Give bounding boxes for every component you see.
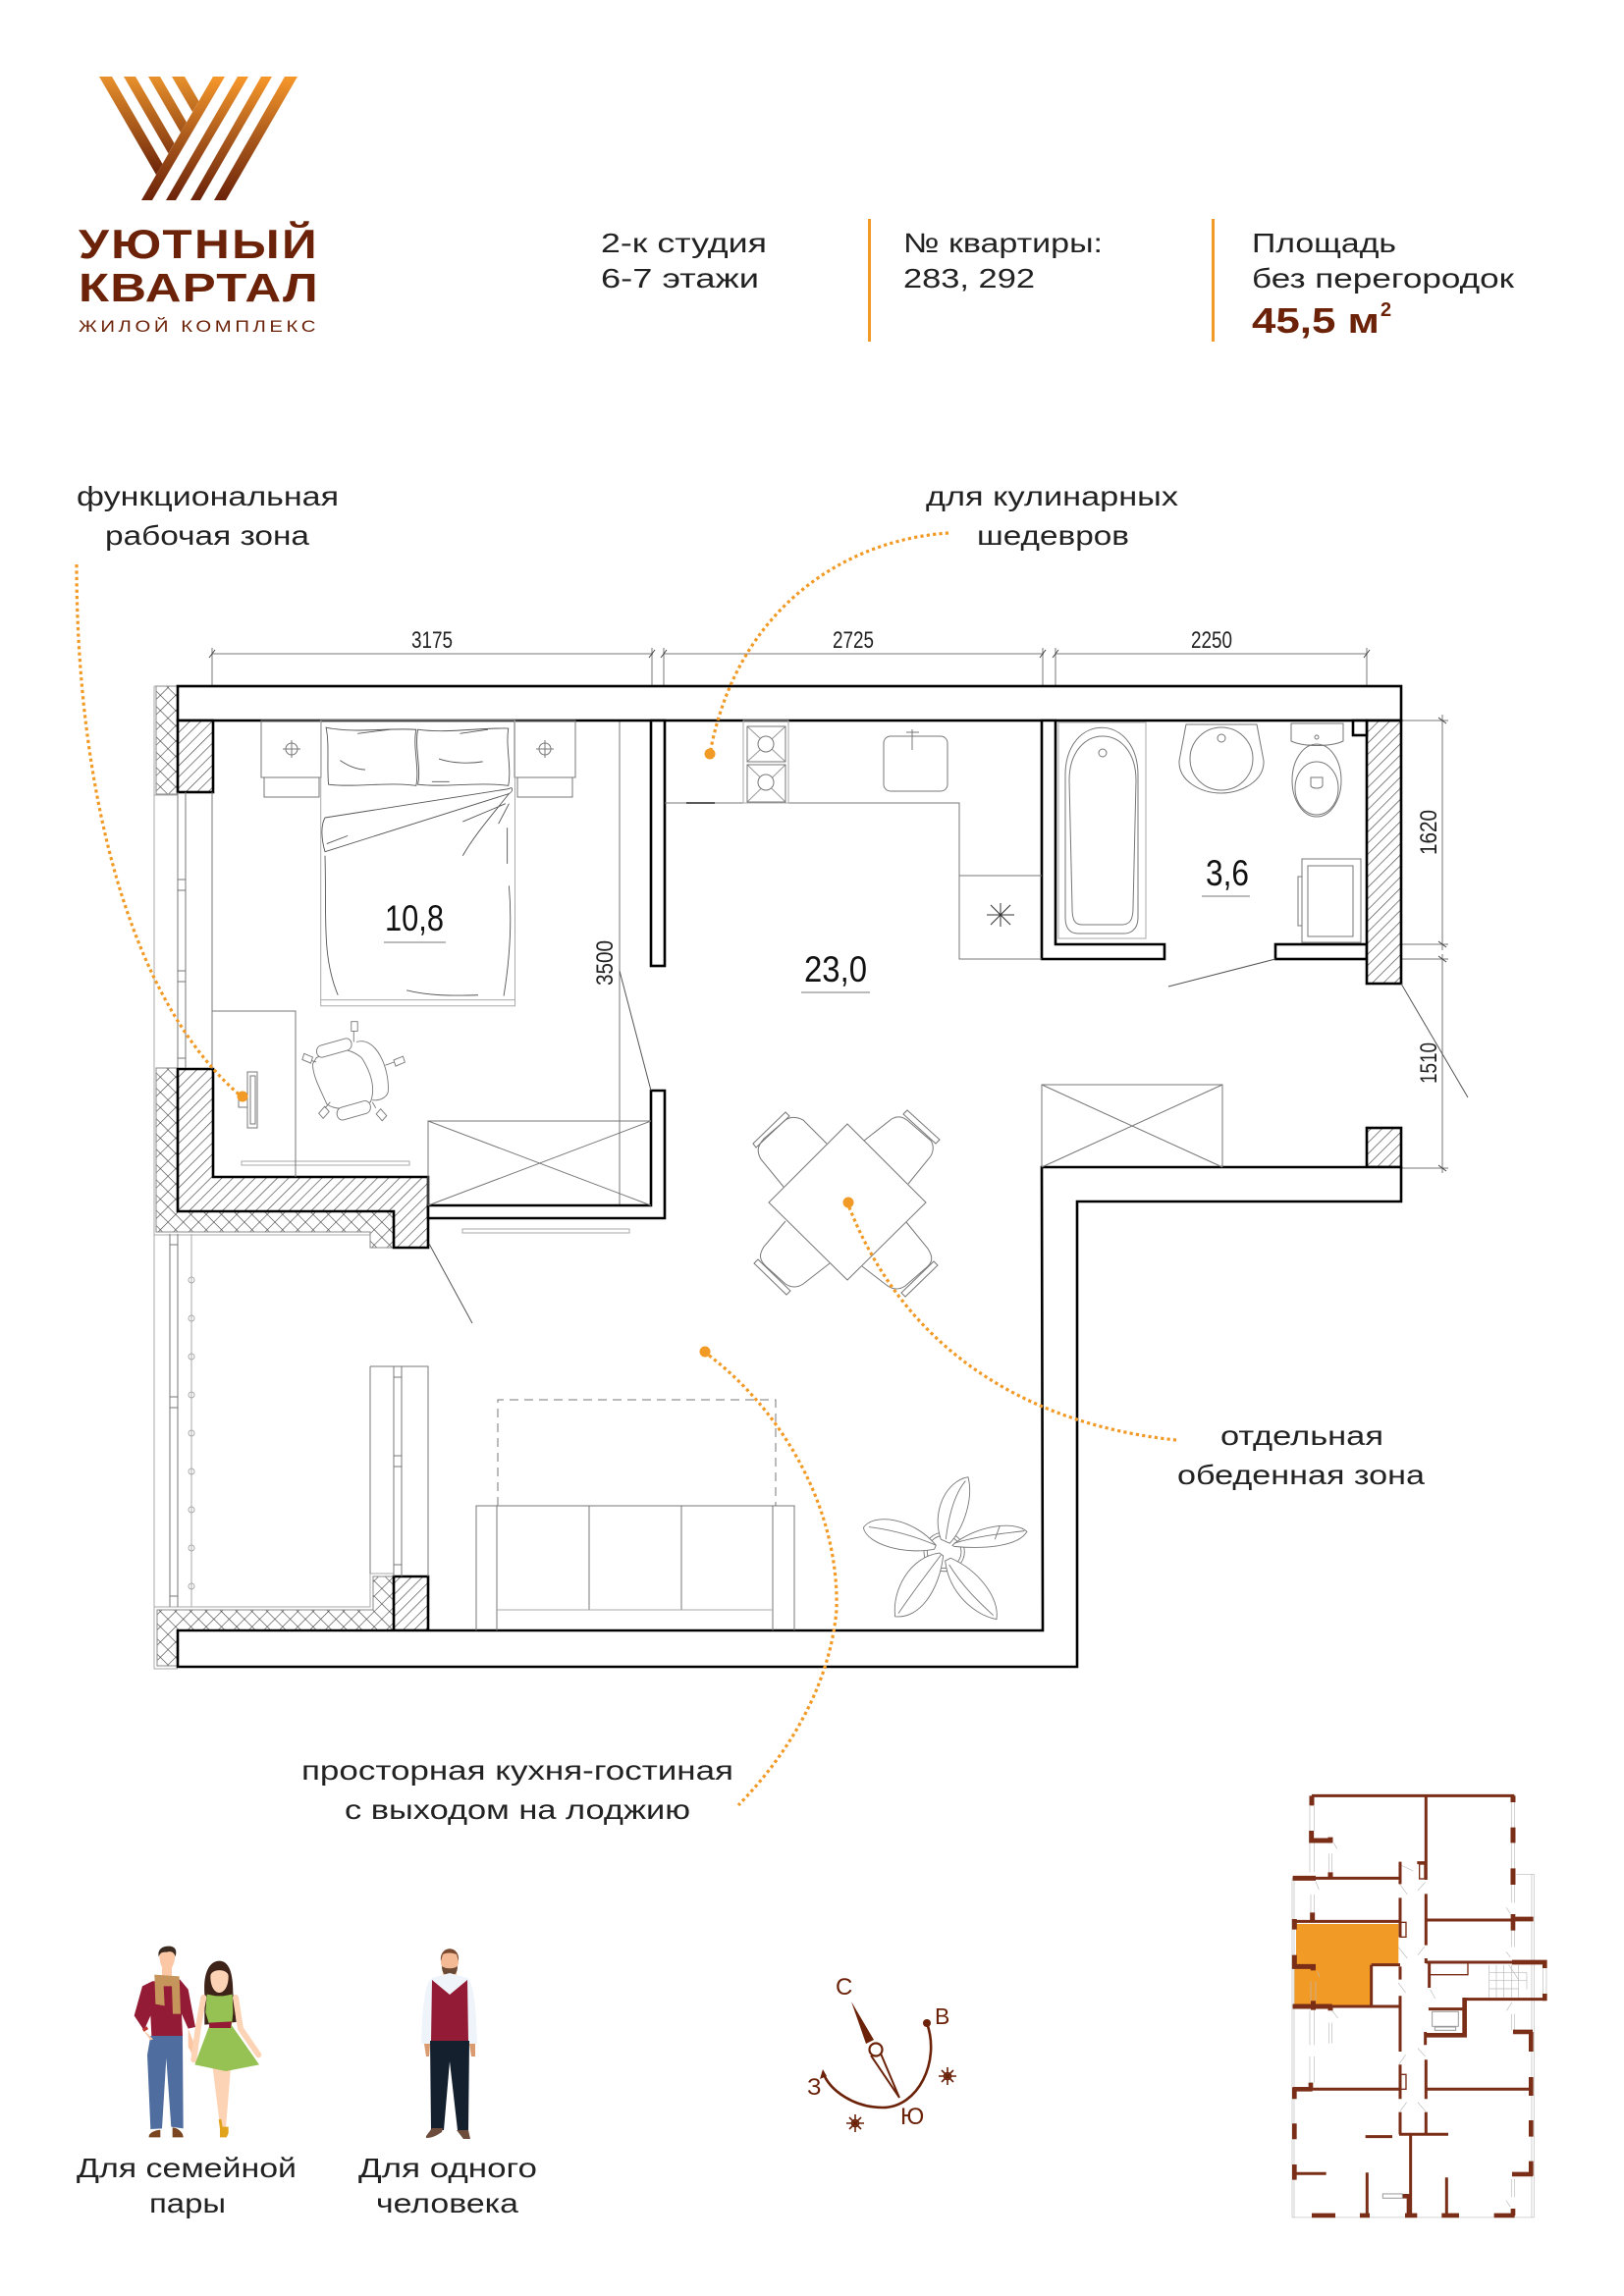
icon: compass: С xyxy=(836,1974,852,2001)
apartment type: 2-к студия xyxy=(601,228,767,258)
apartment number: 283, 292 xyxy=(903,263,1035,294)
icon: compass xyxy=(807,1974,956,2132)
callout line: kitchen xyxy=(705,533,948,760)
area: Площадь xyxy=(1252,228,1396,258)
callout: work zone: функциональная xyxy=(77,481,339,511)
outer gray lines xyxy=(154,686,394,1669)
logo xyxy=(79,77,319,336)
callout: kitchen: шедевров xyxy=(977,520,1129,551)
key plan xyxy=(1292,1795,1546,2217)
logo wordmark: ЖИЛОЙ КОМПЛЕКС xyxy=(79,317,319,336)
callout: dining: обеденная зона xyxy=(1177,1460,1426,1490)
area label: bathroom: 3,6 xyxy=(1206,853,1249,893)
elevator xyxy=(1382,2011,1458,2198)
logo wordmark: УЮТНЫЙ xyxy=(79,220,319,267)
area label: living room: 23,0 xyxy=(804,949,867,989)
callout: kitchen: для кулинарных xyxy=(926,481,1178,511)
callout: kitchen xyxy=(926,481,1178,551)
apartment type: 6-7 этажи xyxy=(601,263,759,294)
callout line: dining xyxy=(842,1198,1176,1440)
dimension lines: 1620 xyxy=(1416,810,1442,855)
apartment number: № квартиры: xyxy=(903,228,1103,258)
divider 2 xyxy=(1212,219,1215,342)
dimension lines: 3175 xyxy=(411,627,453,654)
area: 2 xyxy=(1380,299,1391,321)
plant xyxy=(863,1477,1027,1620)
highlighted apartment xyxy=(1294,1924,1398,2005)
divider 1 xyxy=(868,219,871,342)
dimension lines: 2725 xyxy=(833,627,874,654)
bathroom: toilet xyxy=(1291,723,1343,817)
logo wordmark: КВАРТАЛ xyxy=(79,265,319,310)
walls xyxy=(1293,1795,1544,2216)
label: couple xyxy=(77,2153,297,2218)
bed xyxy=(321,721,514,1006)
dimension lines: 3500 xyxy=(592,940,619,986)
callout: dining: отдельная xyxy=(1220,1420,1383,1451)
floor plan xyxy=(154,627,1468,1669)
logo mark xyxy=(99,77,298,200)
dimension lines: 1510 xyxy=(1416,1042,1442,1084)
kitchen units xyxy=(665,721,1042,959)
icon: compass: З xyxy=(807,2074,821,2101)
icon: compass: В xyxy=(935,2003,949,2029)
bathroom: bathtub xyxy=(1058,722,1146,938)
building outline xyxy=(1292,1802,1546,2217)
dimension lines xyxy=(209,627,1448,1209)
wardrobes xyxy=(428,1085,1222,1205)
bedroom furniture: desk xyxy=(212,1011,296,1177)
icon: single man xyxy=(421,1949,477,2139)
label: couple: пары xyxy=(149,2188,226,2218)
label: single person: человека xyxy=(376,2188,519,2218)
callout: living room: с выходом на лоджию xyxy=(345,1794,690,1825)
callout: work zone xyxy=(77,481,339,551)
office chair xyxy=(302,1022,405,1121)
bedroom furniture: nightstands xyxy=(261,721,575,797)
apartment number xyxy=(903,228,1103,294)
woman xyxy=(193,1961,259,2137)
area xyxy=(1252,228,1515,341)
callout: dining xyxy=(1177,1420,1426,1490)
icon: compass: Ю xyxy=(900,2104,924,2130)
bathroom: washer xyxy=(1298,859,1361,942)
area label: bedroom: 10,8 xyxy=(385,898,444,938)
doors xyxy=(429,959,1468,1323)
callout: living room: просторная кухня-гостиная xyxy=(301,1755,733,1786)
callout: living room xyxy=(301,1755,733,1825)
label: single person: Для одного xyxy=(358,2153,537,2183)
area: 45,5 м xyxy=(1252,300,1380,341)
apartment type xyxy=(601,228,767,294)
callout: work zone: рабочая зона xyxy=(105,520,310,551)
windows and balcony rail xyxy=(170,792,629,1607)
dimension lines: 2250 xyxy=(1191,627,1232,654)
label: single person xyxy=(358,2153,537,2218)
callout line: living room xyxy=(699,1347,837,1805)
label: couple: Для семейной xyxy=(77,2153,297,2183)
walls xyxy=(156,686,1401,1667)
bathroom: basin xyxy=(1179,724,1264,793)
callout line: work zone xyxy=(77,564,247,1101)
logo wordmark xyxy=(79,220,319,336)
dining table with chairs xyxy=(753,1110,940,1297)
area: без перегородок xyxy=(1252,263,1515,294)
icon: couple xyxy=(135,1947,259,2137)
man xyxy=(135,1947,195,2137)
sofa xyxy=(476,1400,794,1630)
